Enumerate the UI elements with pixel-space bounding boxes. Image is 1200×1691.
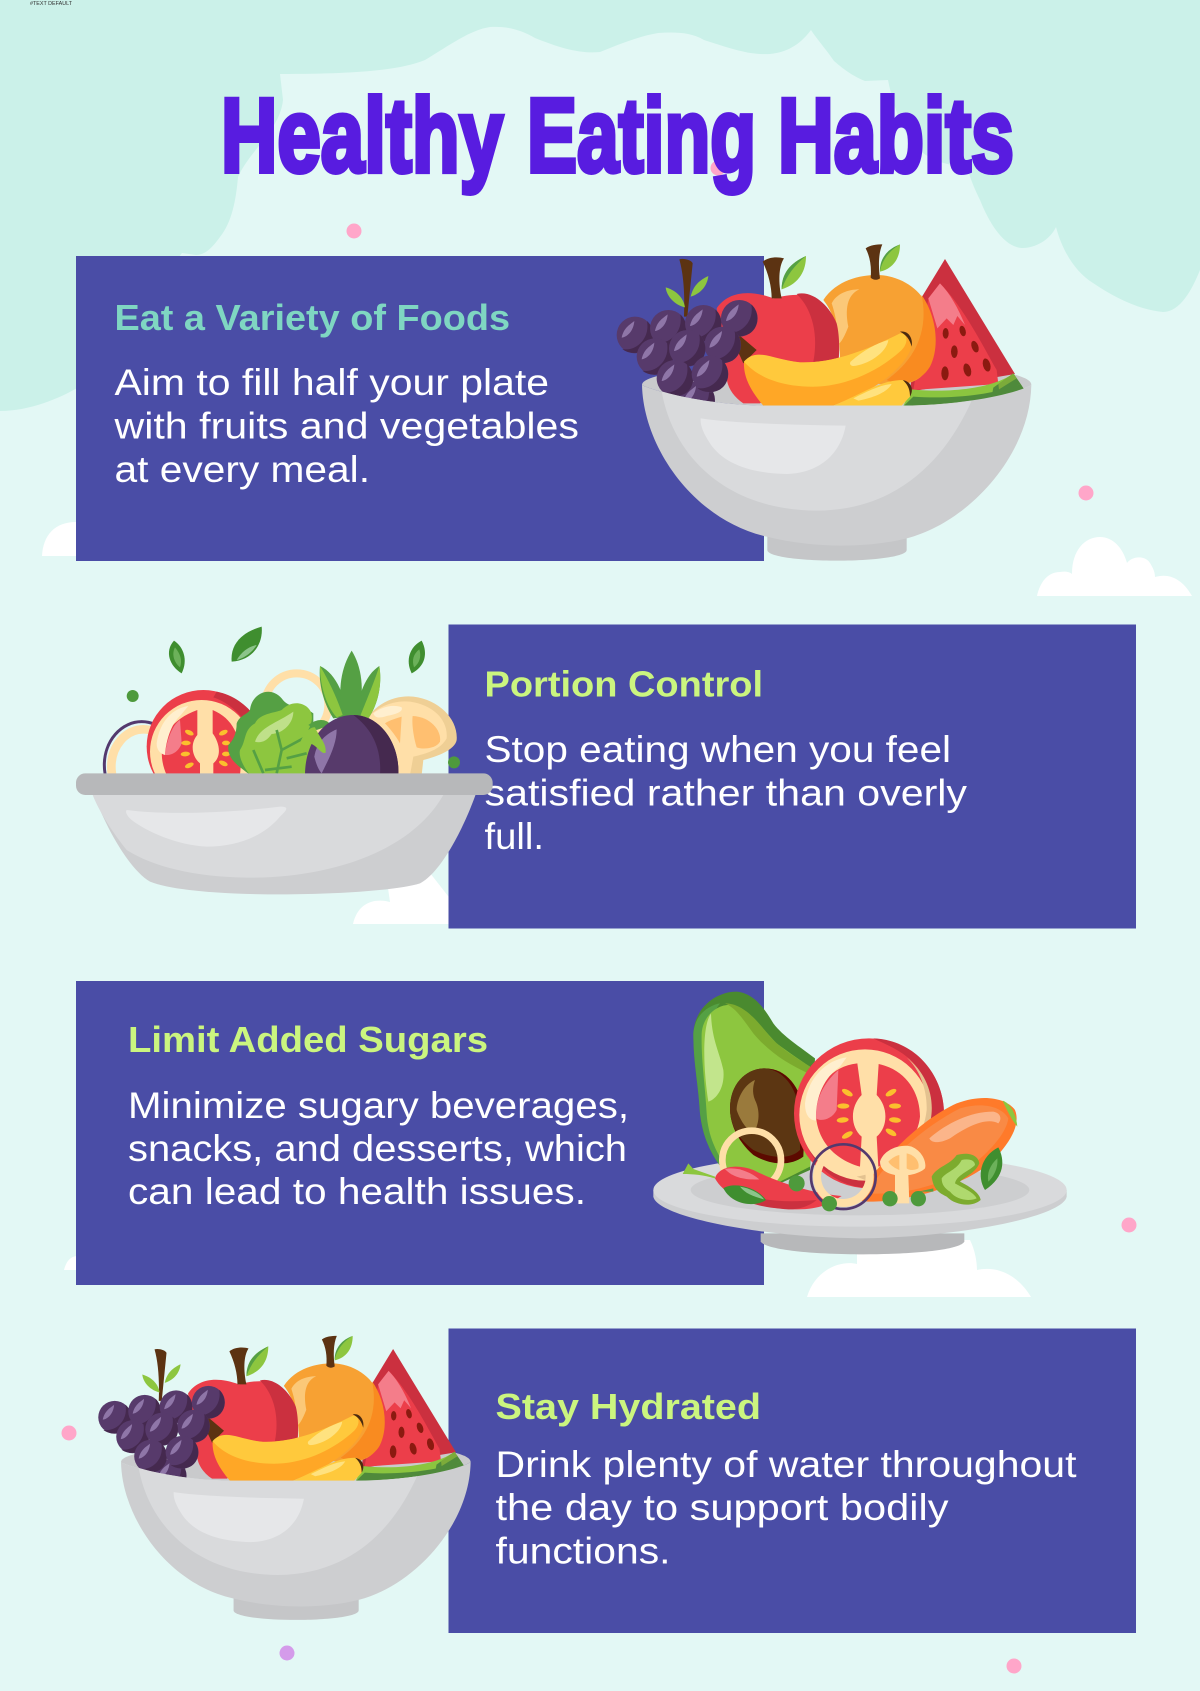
icon: vegetable plate: [653, 992, 1067, 1254]
heading: Portion Control: [484, 664, 763, 704]
body text: satisfied rather than overly: [484, 772, 968, 814]
body text: Minimize sugary beverages,: [128, 1085, 629, 1126]
bowl front: [642, 385, 1031, 546]
eggplant: [305, 715, 398, 775]
greens: [918, 1147, 1002, 1205]
peas: [789, 1175, 926, 1211]
icon: vegetable bowl: [76, 627, 493, 894]
body text: Drink plenty of water throughout: [496, 1444, 1077, 1485]
small leaf: [308, 720, 331, 730]
decorative dot: [1006, 1658, 1022, 1674]
bowl: [76, 773, 493, 894]
mushroom: [880, 1146, 925, 1203]
body text: with fruits and vegetables: [113, 406, 579, 446]
title: Eating: [527, 78, 756, 194]
cloud under plate: [807, 1240, 1031, 1297]
avocado: [693, 992, 815, 1183]
body text: snacks, and desserts, which: [128, 1128, 627, 1169]
panel: eat a variety of foods: [76, 256, 764, 561]
heading: Eat a Variety of Foods: [114, 297, 510, 338]
icon: fruit bowl: [617, 244, 1031, 561]
panel: limit added sugars: [76, 981, 764, 1285]
apple: [717, 256, 839, 403]
lettuce curl: [298, 727, 326, 753]
decorative dot: [1078, 486, 1094, 500]
tomato slice: [147, 690, 260, 803]
leaf on chili: [723, 1185, 766, 1204]
body text: [496, 1444, 1077, 1572]
cloud behind panel 2: [353, 873, 470, 924]
leaves: [169, 627, 425, 673]
onion rings: [104, 673, 328, 808]
heading: Stay Hydrated: [496, 1386, 761, 1427]
title: Habits: [778, 78, 1014, 194]
grapes: [617, 259, 758, 418]
bowl foot: [767, 530, 907, 561]
sweet potato: [858, 1098, 1017, 1202]
decorative dot purple: [280, 1646, 294, 1660]
body text: Aim to fill half your plate: [114, 362, 549, 403]
cloud right of panel 1: [1037, 537, 1192, 596]
lettuce: [228, 692, 318, 775]
tomato slice: [794, 1038, 944, 1188]
title: Healthy: [221, 78, 503, 194]
body text: [128, 1085, 629, 1212]
tiny label: #TEXT DEFAULT: [30, 1, 73, 7]
panel: stay hydrated: [448, 1328, 1136, 1633]
mushroom: [368, 696, 457, 775]
chili: [683, 1163, 842, 1209]
mango: [823, 244, 936, 385]
body text: can lead to health issues.: [128, 1171, 586, 1212]
decorative dot: [1122, 1218, 1136, 1232]
body text: Stop eating when you feel: [484, 729, 951, 770]
background blob: top mint shape: [0, 0, 1200, 411]
body text: [113, 362, 579, 490]
body text: [484, 729, 968, 857]
decorative dot on title: [710, 160, 726, 176]
watermelon: [903, 259, 1025, 406]
heading: Limit Added Sugars: [128, 1019, 488, 1060]
body text: full.: [484, 816, 544, 857]
decorative dot: [346, 224, 362, 238]
decorative dot: [62, 1426, 76, 1440]
peas: [127, 690, 460, 768]
body text: the day to support bodily: [496, 1487, 949, 1528]
body text: at every meal.: [114, 449, 370, 490]
plate: [653, 1153, 1067, 1254]
onion ring: [722, 1131, 781, 1189]
cloud behind panel 3: [64, 1256, 80, 1270]
banana: [732, 331, 912, 406]
purple onion ring: [811, 1144, 876, 1209]
beet leaves: [320, 651, 380, 718]
body text: functions.: [496, 1530, 670, 1572]
panel: portion control: [448, 624, 1136, 928]
icon: fruit bowl small: [98, 1336, 471, 1620]
bowl back rim: [642, 373, 1031, 406]
cloud behind panel 1: [42, 522, 90, 556]
